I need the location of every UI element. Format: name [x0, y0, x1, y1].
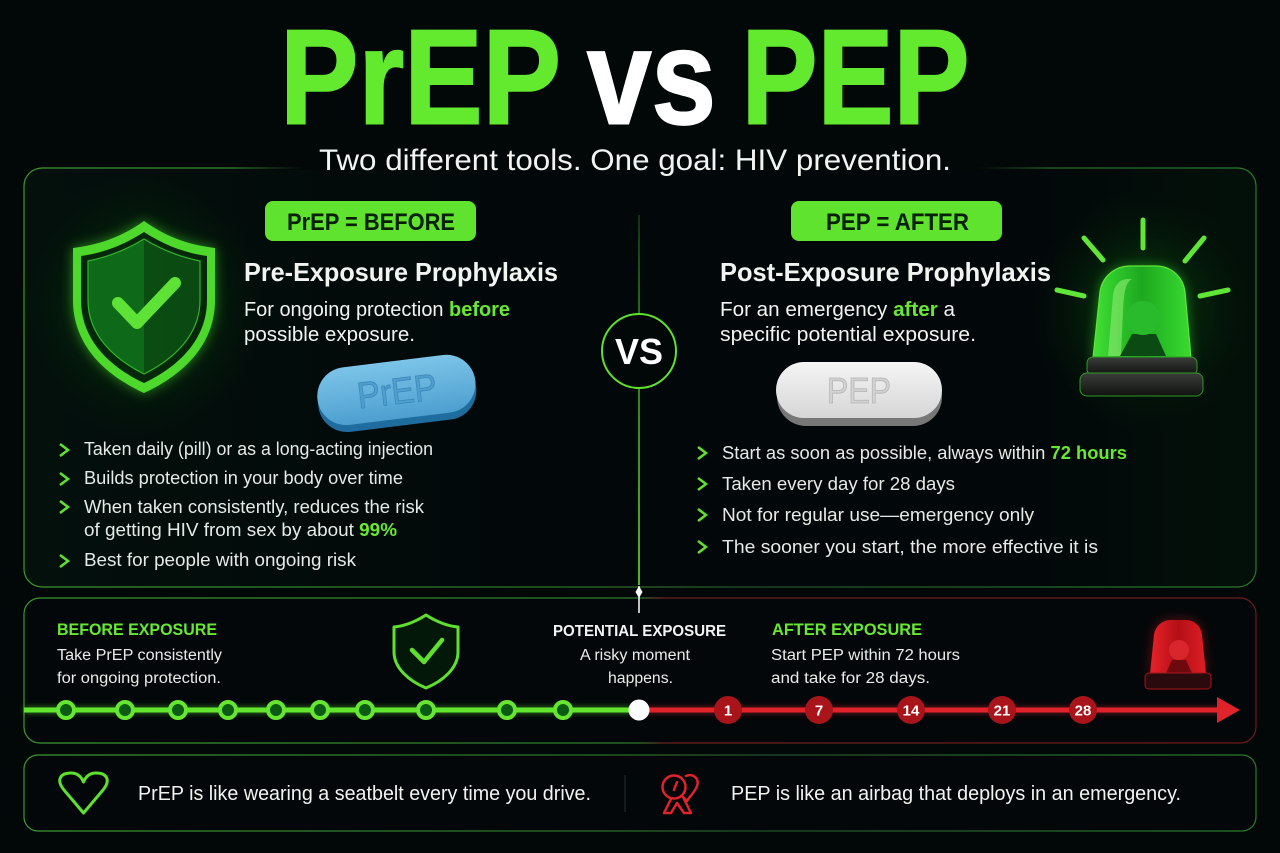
timeline before: green line — [24, 702, 640, 718]
badge: PEP = AFTER: PEP = AFTER — [826, 209, 969, 236]
day 28 — [1069, 696, 1097, 724]
icon: white PEP pill — [776, 362, 942, 426]
icon: blue PrEP pill — [314, 351, 480, 435]
before exposure label: BEFORE EXPOSURE — [57, 620, 217, 639]
list: PrEP facts — [60, 439, 433, 570]
item 3: When taken consistently, reduces the risk — [84, 497, 425, 517]
after exposure label: AFTER EXPOSURE — [772, 620, 922, 639]
panel: comparison — [19, 166, 1256, 587]
heading: Pre-Exposure Prophylaxis: Pre-Exposure Prophylaxis — [244, 257, 558, 287]
text: PrEP description: For ongoing protection before — [244, 299, 510, 321]
item 2: Taken every day for 28 days — [722, 474, 955, 494]
after exposure label: and take for 28 days. — [771, 670, 930, 687]
potential exposure label: POTENTIAL EXPOSURE — [553, 623, 726, 640]
icon: heart — [60, 773, 107, 813]
list: PEP facts — [698, 443, 1127, 557]
icon: green shield — [73, 221, 215, 393]
divider line — [638, 215, 640, 585]
text: PEP analogy: PEP is like an airbag that deploys in an emergency. — [731, 782, 1181, 805]
item 1: Start as soon as possible, always within 72 hours — [722, 443, 1127, 463]
icon: small green shield — [394, 615, 458, 688]
VS circle — [602, 314, 676, 388]
item 3 — [60, 497, 425, 540]
text: PEP description: specific potential exposure. — [720, 324, 976, 346]
exposure marker — [636, 586, 642, 613]
title: vs — [587, 2, 716, 152]
day markers — [714, 696, 1097, 724]
item 3: of getting HIV from sex by about 99% — [84, 520, 397, 540]
before exposure label: Take PrEP consistently — [57, 647, 222, 664]
day 7: 7 — [815, 702, 823, 720]
title — [280, 2, 970, 152]
timeline after: red arrow — [640, 697, 1240, 723]
badge: PrEP = BEFORE: PrEP = BEFORE — [287, 209, 455, 236]
title: PEP — [742, 2, 970, 152]
panel: timeline — [24, 586, 1256, 743]
day 21: 21 — [994, 702, 1010, 720]
icon: white PEP pill: PEP — [827, 370, 891, 411]
potential exposure label: A risky moment — [580, 647, 691, 664]
item 3: Not for regular use—emergency only — [722, 505, 1034, 525]
item 4: The sooner you start, the more effective it is — [722, 537, 1098, 557]
VS circle: VS — [615, 331, 663, 372]
day 7 — [805, 696, 833, 724]
item 1: Taken daily (pill) or as a long-acting injection — [84, 439, 433, 459]
text: PrEP analogy: PrEP is like wearing a seatbelt every time you drive. — [138, 782, 591, 805]
icon: airbag person — [662, 775, 698, 813]
icon: small red siren — [1145, 620, 1211, 689]
panel: analogies — [24, 755, 1256, 831]
heading: Post-Exposure Prophylaxis: Post-Exposure Prophylaxis — [720, 257, 1051, 287]
day 1 — [714, 696, 742, 724]
after exposure label: Start PEP within 72 hours — [771, 647, 960, 664]
day 14 — [897, 696, 925, 724]
day 28: 28 — [1075, 702, 1091, 720]
text: PEP description: For an emergency after a — [720, 299, 956, 321]
before exposure label: for ongoing protection. — [57, 670, 221, 687]
potential exposure label — [553, 623, 726, 687]
icon: green siren — [1057, 220, 1228, 396]
day 21 — [988, 696, 1016, 724]
badge: PEP = AFTER — [791, 201, 1002, 241]
green day markers — [58, 702, 571, 718]
potential exposure label: happens. — [608, 670, 673, 687]
day 1: 1 — [724, 702, 732, 720]
badge: PrEP = BEFORE — [265, 201, 476, 241]
after exposure label — [771, 620, 960, 687]
item 2: Builds protection in your body over time — [84, 468, 403, 488]
text: PrEP description — [244, 299, 510, 346]
item 4: Best for people with ongoing risk — [84, 550, 357, 570]
subtitle: Two different tools. One goal: HIV prevention. — [319, 144, 951, 177]
before exposure label — [57, 620, 222, 687]
text: PrEP description: possible exposure. — [244, 324, 415, 346]
text: PEP description — [720, 299, 976, 346]
title: PrEP — [280, 2, 561, 152]
icon: blue PrEP pill: PrEP — [355, 366, 439, 417]
exposure point — [628, 700, 650, 720]
day 14: 14 — [903, 702, 920, 720]
